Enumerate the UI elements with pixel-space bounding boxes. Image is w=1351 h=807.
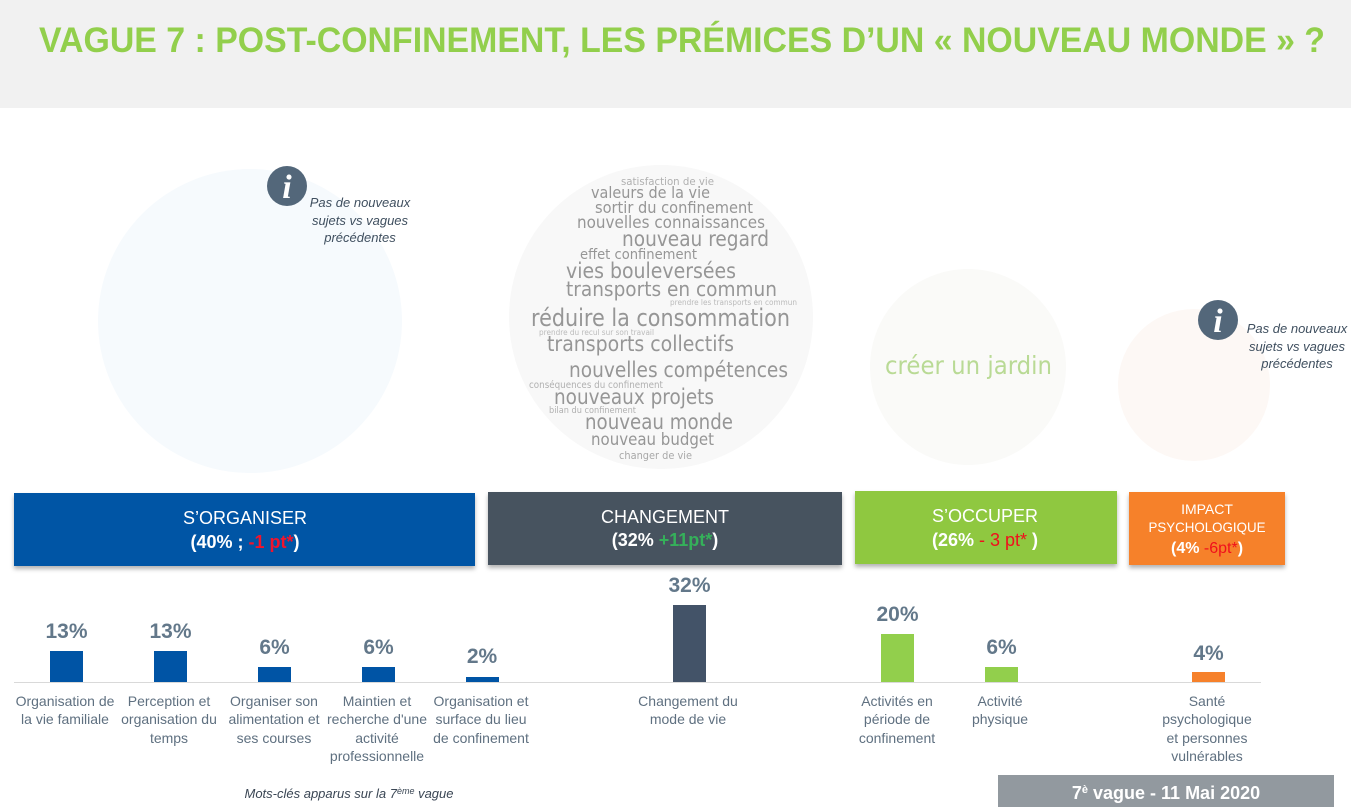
- header: s'occuper: S’OCCUPER: [932, 506, 1038, 526]
- footnote: keywords: Mots-clés apparus sur la 7: [244, 786, 397, 801]
- bubble: changement word cloud: nouveaux projets: [554, 385, 714, 409]
- label: activité professionnelle: [327, 693, 427, 764]
- bar: activités en confinement 20%: [876, 603, 919, 682]
- label: activités en période de confinement: Activités en: [861, 693, 933, 709]
- label: organisation de la vie familiale: Organisation de: [16, 693, 115, 709]
- bar: changement du mode de vie 32%: 32%: [668, 574, 711, 597]
- note: no new topics, left: Pas de nouveaux: [310, 195, 411, 210]
- label: santé psychologique: Santé: [1189, 693, 1226, 709]
- bar: changement du mode de vie 32%: [668, 574, 711, 682]
- bar: organisation vie familiale 13%: [45, 620, 88, 682]
- label: activité professionnelle: recherche d'une: [327, 711, 427, 727]
- bar: activité professionnelle 6%: 6%: [363, 636, 394, 659]
- title banner: [0, 0, 1351, 108]
- bar: lieu de confinement 2%: 2%: [467, 645, 497, 668]
- bar: activité physique 6%: [985, 636, 1018, 682]
- bubble: changement word cloud: transports en commun: [566, 277, 777, 301]
- label: activité professionnelle: professionnelle: [330, 748, 424, 764]
- header: changement: (32% +11pt*): [612, 530, 718, 550]
- label: activité physique: Activité: [977, 693, 1023, 709]
- header: impact psychologique: PSYCHOLOGIQUE: [1148, 519, 1266, 535]
- bar: santé psychologique 4%: [1192, 642, 1225, 682]
- label: perception et organisation du temps: temps: [150, 730, 188, 746]
- label: activités en période de confinement: confinement: [859, 730, 935, 746]
- label: santé psychologique: psychologique: [1162, 711, 1252, 727]
- label: changement du mode de vie: Changement du: [638, 693, 738, 709]
- header: impact psychologique: IMPACT: [1181, 501, 1233, 517]
- icon: info, right: [1198, 300, 1238, 340]
- bubble: changement word cloud: nouveau monde: [585, 410, 733, 434]
- header: s'organiser: [14, 493, 475, 566]
- label: lieu de confinement: [433, 693, 529, 746]
- bubble: changement word cloud: nouveau budget: [591, 430, 714, 450]
- label: alimentation et courses: ses courses: [237, 730, 311, 746]
- label: alimentation et courses: Organiser son: [230, 693, 318, 709]
- bubble: s'occuper word cloud: créer un jardin: [885, 351, 1052, 380]
- bar: activité physique 6%: 6%: [986, 636, 1017, 659]
- header: changement: CHANGEMENT: [601, 507, 729, 527]
- label: lieu de confinement: surface du lieu: [435, 711, 527, 727]
- footnote: keywords: ème: [397, 786, 414, 796]
- bar: perception du temps 13%: [149, 620, 192, 682]
- bar: perception du temps 13%: 13%: [149, 620, 192, 643]
- label: santé psychologique: [1162, 693, 1252, 764]
- date badge: è: [1082, 784, 1088, 796]
- header: impact psychologique: [1129, 492, 1285, 565]
- bar: alimentation 6%: 6%: [259, 636, 290, 659]
- note: no new topics, left: précédentes: [323, 230, 396, 245]
- label: lieu de confinement: Organisation et: [434, 693, 529, 709]
- header: s'organiser: (40% ; -1 pt*): [190, 532, 300, 552]
- header: s'occuper: (26% - 3 pt* ): [932, 530, 1038, 550]
- note: no new topics, right: Pas de nouveaux: [1247, 321, 1348, 336]
- label: activité professionnelle: Maintien et: [343, 693, 411, 709]
- bubble: changement word cloud: prendre du recul sur son travail: [539, 328, 654, 337]
- bubble: changement word cloud: satisfaction de vie: [621, 176, 714, 188]
- bubble: s'organiser: [98, 169, 402, 473]
- header: s'organiser: S’ORGANISER: [183, 508, 307, 528]
- bar: alimentation 6%: [258, 636, 291, 682]
- bubble: changement word cloud: réduire la consommation: [531, 304, 790, 332]
- label: activités en période de confinement: [859, 693, 935, 746]
- bubble: s'occuper word cloud: [870, 269, 1066, 465]
- bar: santé psychologique 4%: 4%: [1193, 642, 1224, 665]
- bubble: changement word cloud: [509, 165, 813, 469]
- bar: activités en confinement 20%: 20%: [876, 603, 919, 626]
- bubble: changement word cloud: conséquences du confinement: [529, 380, 663, 391]
- label: alimentation et courses: alimentation et: [228, 711, 320, 727]
- bubble: changement word cloud: nouvelles compétences: [569, 358, 788, 382]
- bubble: changement word cloud: nouveau regard: [622, 227, 769, 251]
- note: no new topics, right: précédentes: [1260, 356, 1333, 371]
- bar: activité professionnelle 6%: [362, 636, 395, 682]
- label: santé psychologique: et personnes: [1167, 730, 1247, 746]
- header: changement: [488, 492, 842, 565]
- date badge: vague - 11 Mai 2020: [1088, 783, 1260, 803]
- bubble: changement word cloud: effet confinement: [580, 247, 697, 263]
- bar: lieu de confinement 2%: [466, 645, 499, 682]
- date badge: [998, 775, 1334, 807]
- bubble: changement word cloud: bilan du confinement: [549, 406, 637, 416]
- label: activités en période de confinement: période de: [864, 711, 930, 727]
- icon: info, left: [267, 166, 307, 206]
- label: changement du mode de vie: mode de vie: [650, 711, 726, 727]
- label: lieu de confinement: de confinement: [433, 730, 529, 746]
- bubble: changement word cloud: sortir du confinement: [595, 198, 753, 217]
- label: activité physique: [972, 693, 1028, 727]
- bubble: changement word cloud: vies bouleversées: [566, 259, 736, 283]
- date badge: 7: [1072, 783, 1082, 803]
- label: activité professionnelle: activité: [355, 730, 399, 746]
- bubble: changement word cloud: nouvelles connaissances: [577, 213, 765, 233]
- label: alimentation et courses: [228, 693, 320, 746]
- title: VAGUE 7 : POST-CONFINEMENT, LES PRÉMICES D’UN « NOUVEAU MONDE » ?: [39, 20, 1325, 60]
- bar chart: [14, 574, 1261, 682]
- icon: info, left: i: [282, 169, 292, 206]
- bubble: impact psychologique: [1118, 309, 1270, 461]
- bar: organisation vie familiale 13%: 13%: [45, 620, 88, 643]
- bubble: changement word cloud: changer de vie: [619, 449, 692, 462]
- header: impact psychologique: (4% -6pt*): [1171, 540, 1243, 557]
- note: no new topics, right: [1247, 321, 1348, 371]
- icon: info, right: i: [1213, 303, 1223, 340]
- label: perception et organisation du temps: organisation du: [121, 711, 217, 727]
- label: changement du mode de vie: [638, 693, 738, 727]
- bubble: changement word cloud: prendre les transports en commun: [670, 298, 797, 307]
- note: no new topics, left: [310, 195, 411, 245]
- label: perception et organisation du temps: [121, 693, 217, 746]
- bubble: changement word cloud: valeurs de la vie: [591, 183, 710, 202]
- label: perception et organisation du temps: Perception et: [128, 693, 210, 709]
- bubble: changement word cloud: transports collectifs: [547, 332, 734, 356]
- header: s'occuper: [855, 491, 1117, 564]
- note: no new topics, left: sujets vs vagues: [312, 213, 409, 228]
- label: santé psychologique: vulnérables: [1171, 748, 1243, 764]
- label: activité physique: physique: [972, 711, 1028, 727]
- footnote: keywords: vague: [414, 786, 454, 801]
- note: no new topics, right: sujets vs vagues: [1249, 339, 1346, 354]
- label: organisation de la vie familiale: la vie familiale: [21, 711, 109, 727]
- label: organisation de la vie familiale: [16, 693, 115, 727]
